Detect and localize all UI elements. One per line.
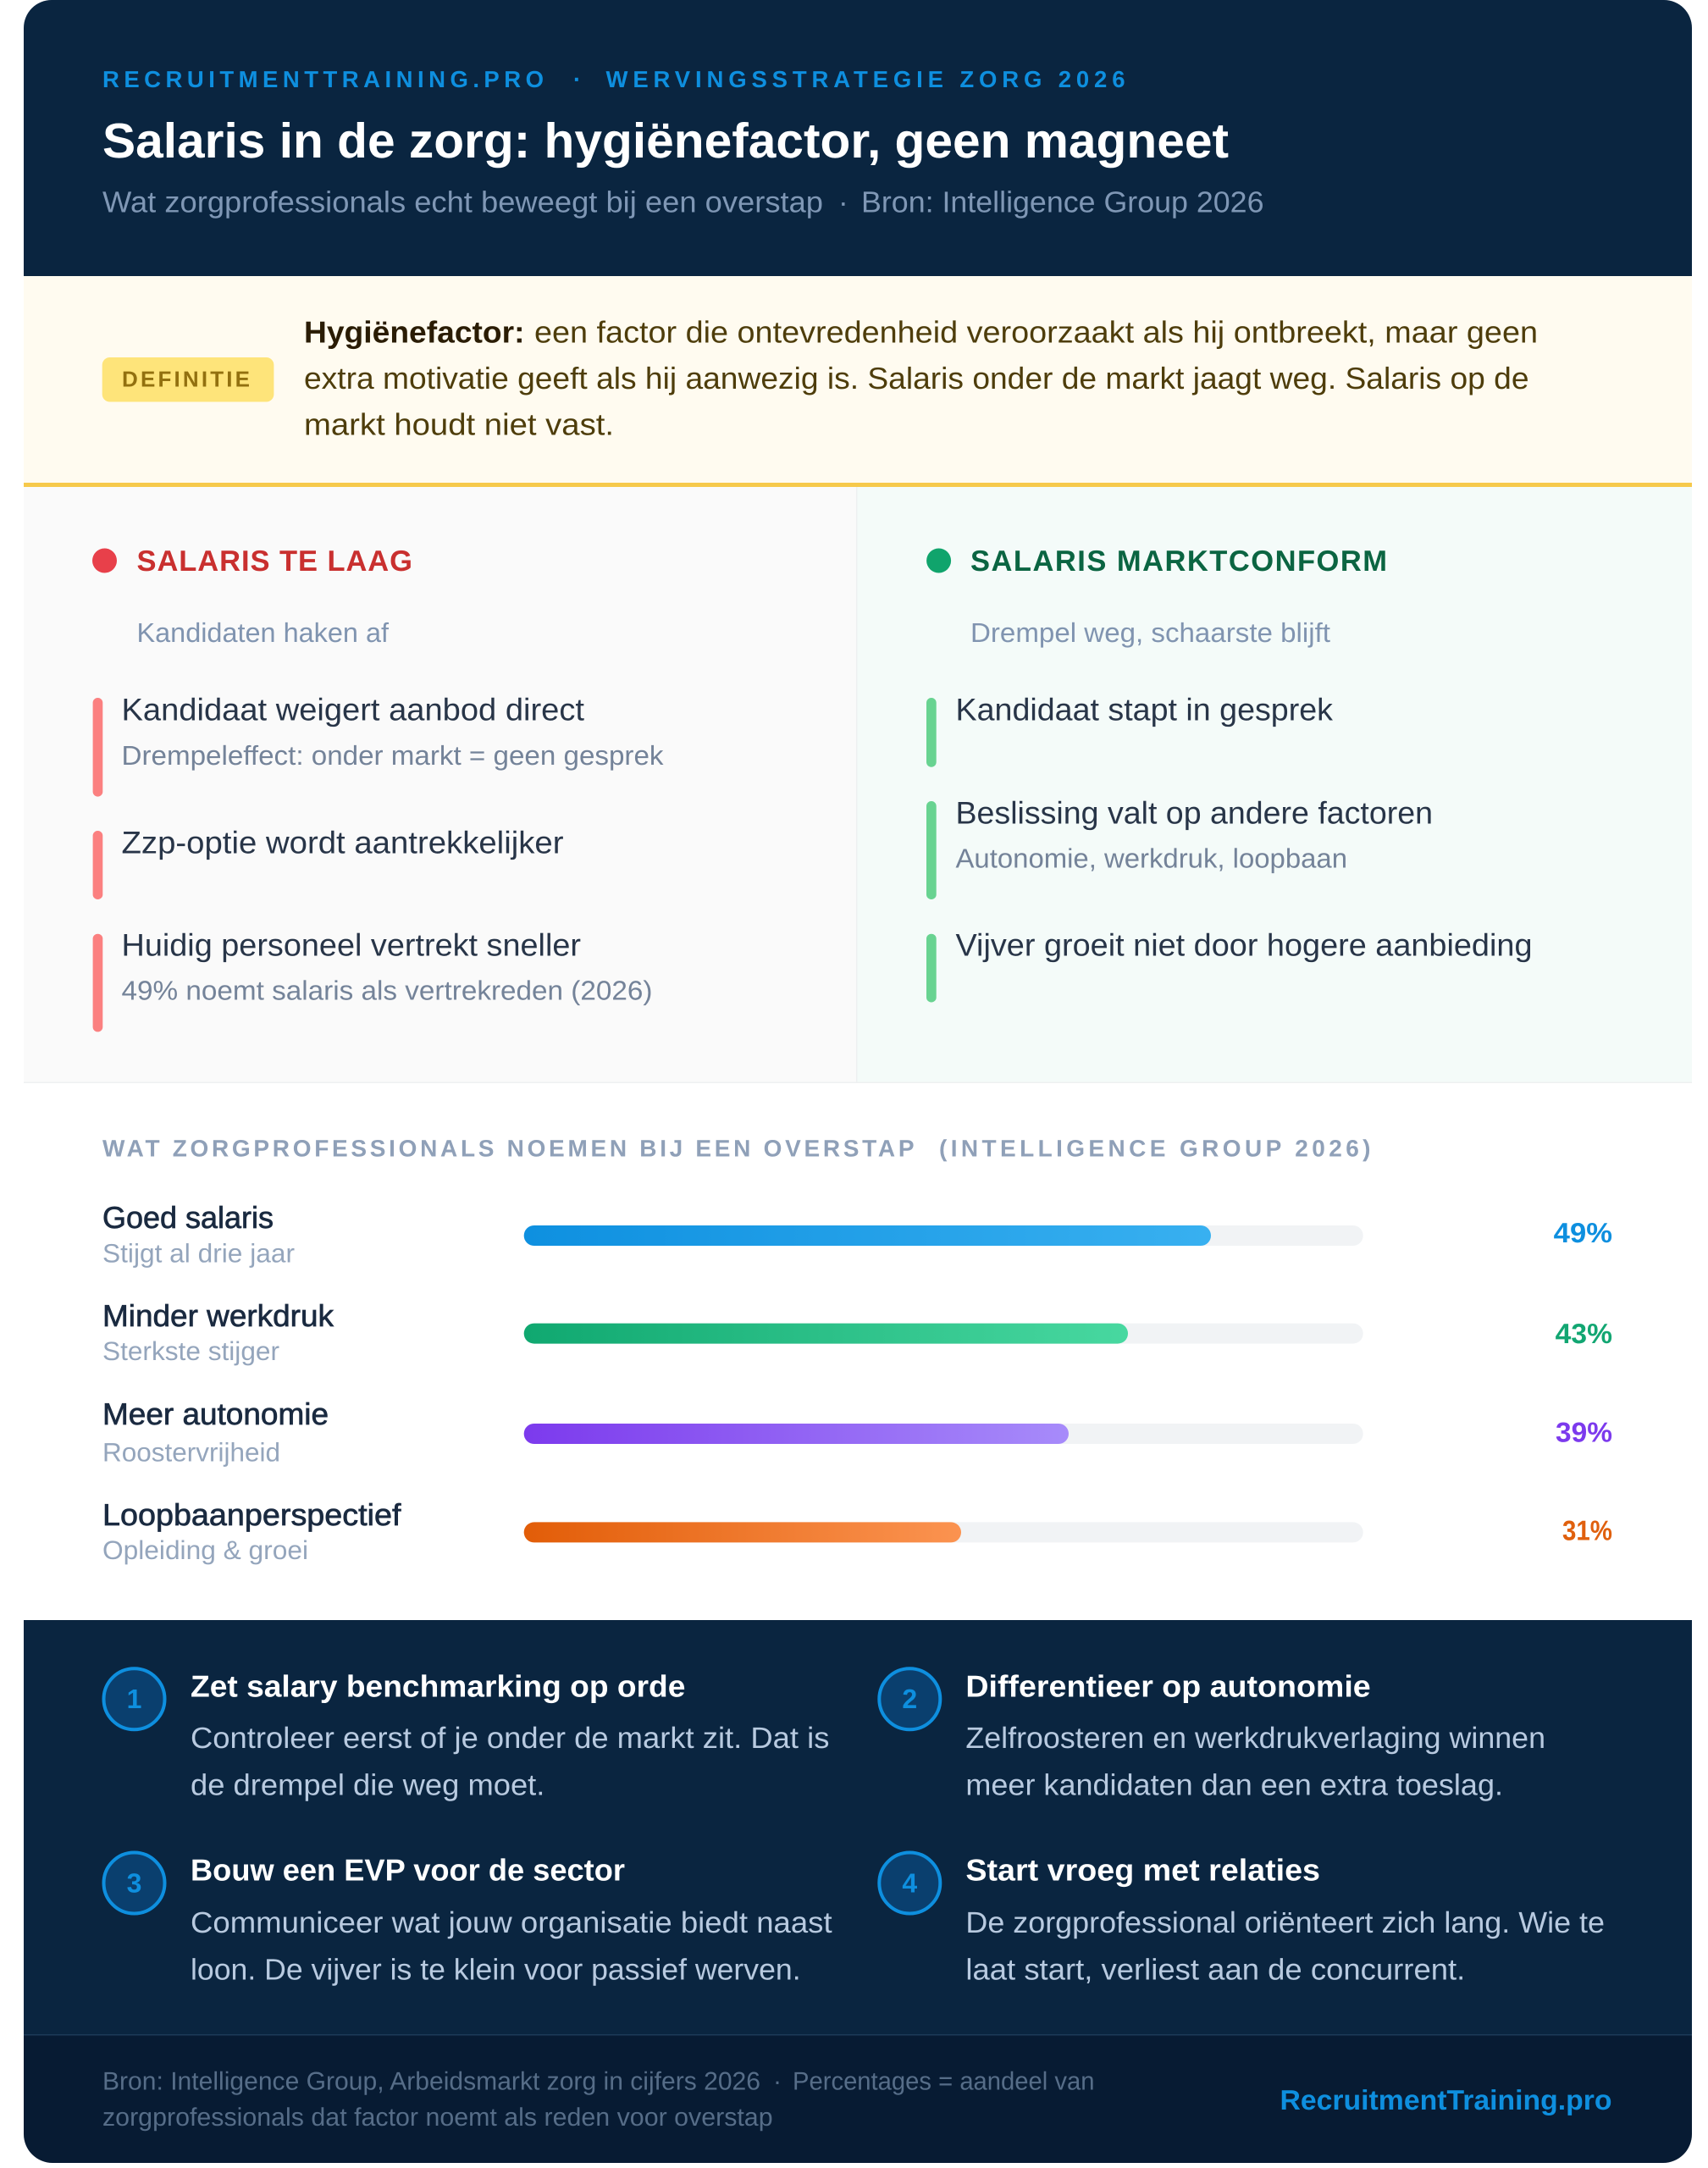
step 3: 3 <box>127 1868 141 1899</box>
row: goed salaris: Stijgt al drie jaar <box>102 1239 295 1269</box>
chart heading: WAT ZORGPROFESSIONALS NOEMEN BIJ EEN OVERSTAP <box>102 1135 915 1162</box>
eyebrow: · <box>573 66 581 92</box>
step 1: de drempel die weg moet. <box>191 1769 544 1802</box>
step 2 <box>879 1668 1545 1802</box>
step 4: laat start, verliest aan de concurrent. <box>965 1954 1465 1987</box>
item: andere factoren: Autonomie, werkdruk, loopbaan <box>955 843 1347 874</box>
step 4: Start vroeg met relaties <box>965 1853 1320 1888</box>
row: loopbaanperspectief: Opleiding & groei <box>102 1535 308 1565</box>
item: personeel vertrekt <box>93 927 653 1031</box>
item: stapt in gesprek <box>926 693 1333 767</box>
definition text: Hygiënefactor: <box>304 315 525 349</box>
step 2: 2 <box>902 1684 917 1714</box>
badge: definitie <box>102 357 274 401</box>
row: goed salaris: 49% <box>1554 1217 1612 1248</box>
panel: salaris te laag <box>24 487 857 1082</box>
row: minder werkdruk <box>102 1298 1612 1366</box>
definition text: markt houdt niet vast. <box>304 407 614 442</box>
subheading: Kandidaten haken af <box>137 617 389 648</box>
panel: salaris marktconform <box>857 487 1692 1082</box>
definition text <box>304 315 1538 442</box>
step 3: loon. De vijver is te klein voor passief werven. <box>191 1954 801 1987</box>
step 3: Bouw een EVP voor de sector <box>191 1853 625 1888</box>
subtitle: Wat zorgprofessionals echt beweegt bij een overstap <box>102 186 823 219</box>
panel: actions <box>24 1620 1692 2035</box>
heading: salaris marktconform: SALARIS MARKTCONFORM <box>970 545 1387 578</box>
step 3 <box>103 1853 832 1987</box>
step 1 <box>103 1668 829 1802</box>
eyebrow <box>102 66 1125 92</box>
item: zzp-optie <box>93 826 564 899</box>
step 2: Zelfroosteren en werkdrukverlaging winnen <box>965 1722 1545 1755</box>
step 3: Communiceer wat jouw organisatie biedt naast <box>191 1906 832 1939</box>
step 1: Zet salary benchmarking op orde <box>191 1668 685 1704</box>
step 1: 1 <box>127 1684 141 1714</box>
subtitle <box>102 186 1263 219</box>
item: stapt in gesprek: Kandidaat stapt in gesprek <box>955 693 1333 727</box>
badge: definitie: DEFINITIE <box>122 366 250 391</box>
source note: Bron: Intelligence Group, Arbeidsmarkt zorg in cijfers 2026 <box>102 2067 760 2095</box>
icon: green dot <box>926 549 951 572</box>
item: vijver groeit niet <box>926 927 1533 1003</box>
row: loopbaanperspectief <box>102 1497 1612 1565</box>
subtitle: · <box>838 186 848 219</box>
chart heading <box>102 1135 1370 1162</box>
source note <box>102 2067 1094 2132</box>
row: meer autonomie: Roostervrijheid <box>102 1438 280 1468</box>
subheading: Drempel weg, schaarste blijft <box>970 617 1330 648</box>
icon: red dot <box>92 549 117 572</box>
step 2: meer kandidaten dan een extra toeslag. <box>965 1769 1503 1802</box>
item: andere factoren: Beslissing valt op andere factoren <box>955 796 1433 831</box>
row: minder werkdruk: Minder werkdruk <box>102 1298 334 1333</box>
definition text: extra motivatie geeft als hij aanwezig is. Salaris onder de markt jaagt weg. Salaris op de <box>304 361 1529 395</box>
item: personeel vertrekt: 49% noemt salaris als vertrekreden (2026) <box>122 976 652 1006</box>
subtitle: Bron: Intelligence Group 2026 <box>861 186 1263 219</box>
step 4: De zorgprofessional oriënteert zich lang. Wie te <box>965 1906 1605 1939</box>
step 4 <box>879 1853 1605 1987</box>
row: loopbaanperspectief: Loopbaanperspectief <box>102 1497 402 1532</box>
row: minder werkdruk: Sterkste stijger <box>102 1336 279 1366</box>
row: meer autonomie: Meer autonomie <box>102 1396 329 1431</box>
row: meer autonomie: 39% <box>1556 1416 1612 1448</box>
chart heading: (INTELLIGENCE GROUP 2026) <box>939 1135 1370 1162</box>
item: vijver groeit niet: Vijver groeit niet door hogere aanbieding <box>955 927 1533 962</box>
step 4: 4 <box>902 1868 917 1899</box>
source note: Percentages = aandeel van <box>793 2067 1094 2095</box>
eyebrow: WERVINGSSTRATEGIE ZORG 2026 <box>606 66 1125 92</box>
eyebrow: RECRUITMENTTRAINING.PRO <box>102 66 544 92</box>
item: weigert aanbod <box>93 693 665 797</box>
item: weigert aanbod: Drempeleffect: onder markt = geen gesprek <box>122 740 665 771</box>
row: goed salaris <box>102 1200 1612 1269</box>
definition text: een factor die ontevredenheid veroorzaakt als hij ontbreekt, maar geen <box>534 315 1538 349</box>
item: zzp-optie: Zzp-optie wordt aantrekkelijker <box>122 826 564 860</box>
row: loopbaanperspectief: 31% <box>1562 1514 1612 1546</box>
row: meer autonomie <box>102 1396 1612 1468</box>
panel: definition <box>24 276 1692 487</box>
heading: salaris te laag: SALARIS TE LAAG <box>137 545 412 578</box>
title: Salaris in de zorg: hygiënefactor, geen magneet <box>102 113 1229 169</box>
item: personeel vertrekt: Huidig personeel vertrekt sneller <box>122 927 581 962</box>
item: andere factoren <box>926 796 1433 899</box>
panel: header <box>24 0 1692 276</box>
step 1: Controleer eerst of je onder de markt zit. Dat is <box>191 1722 829 1755</box>
row: goed salaris: Goed salaris <box>102 1200 274 1235</box>
step 2: Differentieer op autonomie <box>965 1668 1371 1704</box>
source note: · <box>773 2067 782 2095</box>
source note: zorgprofessionals dat factor noemt als reden voor overstap <box>102 2104 773 2132</box>
item: weigert aanbod: Kandidaat weigert aanbod direct <box>122 693 585 727</box>
panel: bar chart <box>102 1135 1612 1565</box>
brand link: RecruitmentTraining.pro <box>1280 2084 1612 2115</box>
panel: footer <box>24 2034 1692 2163</box>
row: minder werkdruk: 43% <box>1556 1318 1612 1349</box>
